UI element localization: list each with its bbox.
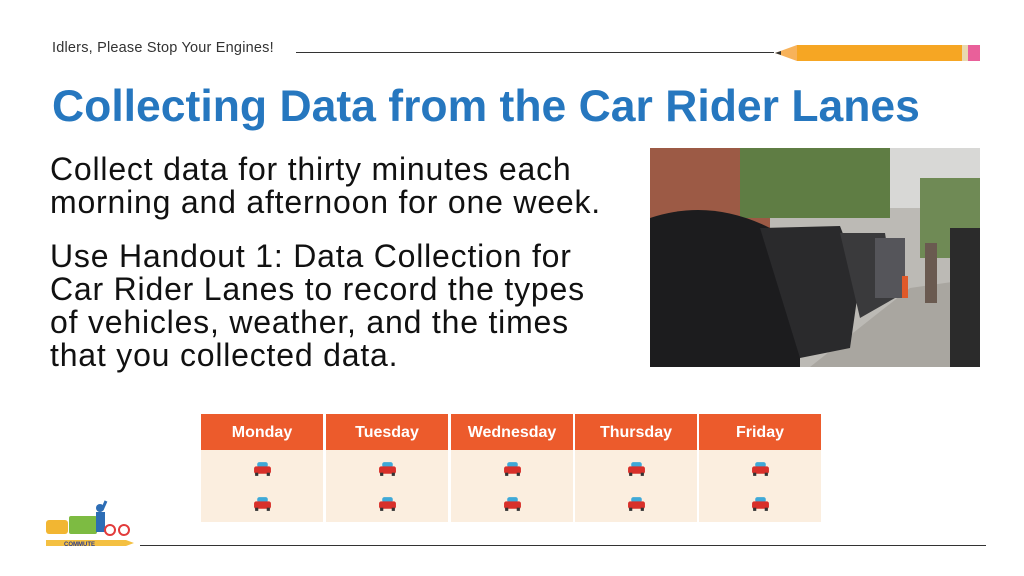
column: Thursday: Thursday <box>600 424 672 441</box>
icon: pencil <box>775 45 980 61</box>
logo: Georgia Commute Schools: COMMUTE <box>64 542 95 548</box>
logo: Georgia Commute Schools <box>46 500 134 548</box>
column: Friday: Friday <box>736 424 784 441</box>
title: Collecting Data from the Car Rider Lanes <box>52 82 920 131</box>
column: Wednesday <box>451 414 573 522</box>
text block: Collect data for thirty minutes each <box>50 151 571 187</box>
column: Monday: Monday <box>232 424 292 441</box>
column: Wednesday: Wednesday <box>468 424 556 441</box>
text block: of vehicles, weather, and the times <box>50 304 569 340</box>
photo: cars in line <box>650 148 980 367</box>
column: Tuesday <box>326 414 448 522</box>
text block: morning and afternoon for one week. <box>50 184 601 220</box>
column: Tuesday: Tuesday <box>355 424 419 441</box>
text block <box>50 151 601 373</box>
header text: Idlers, Please Stop Your Engines! <box>52 40 274 56</box>
column: Monday <box>201 414 323 522</box>
column: Thursday <box>575 414 697 522</box>
column: Friday <box>699 414 821 522</box>
text block: that you collected data. <box>50 337 398 373</box>
text block: Car Rider Lanes to record the types <box>50 271 585 307</box>
text block: Use Handout 1: Data Collection for <box>50 238 572 274</box>
